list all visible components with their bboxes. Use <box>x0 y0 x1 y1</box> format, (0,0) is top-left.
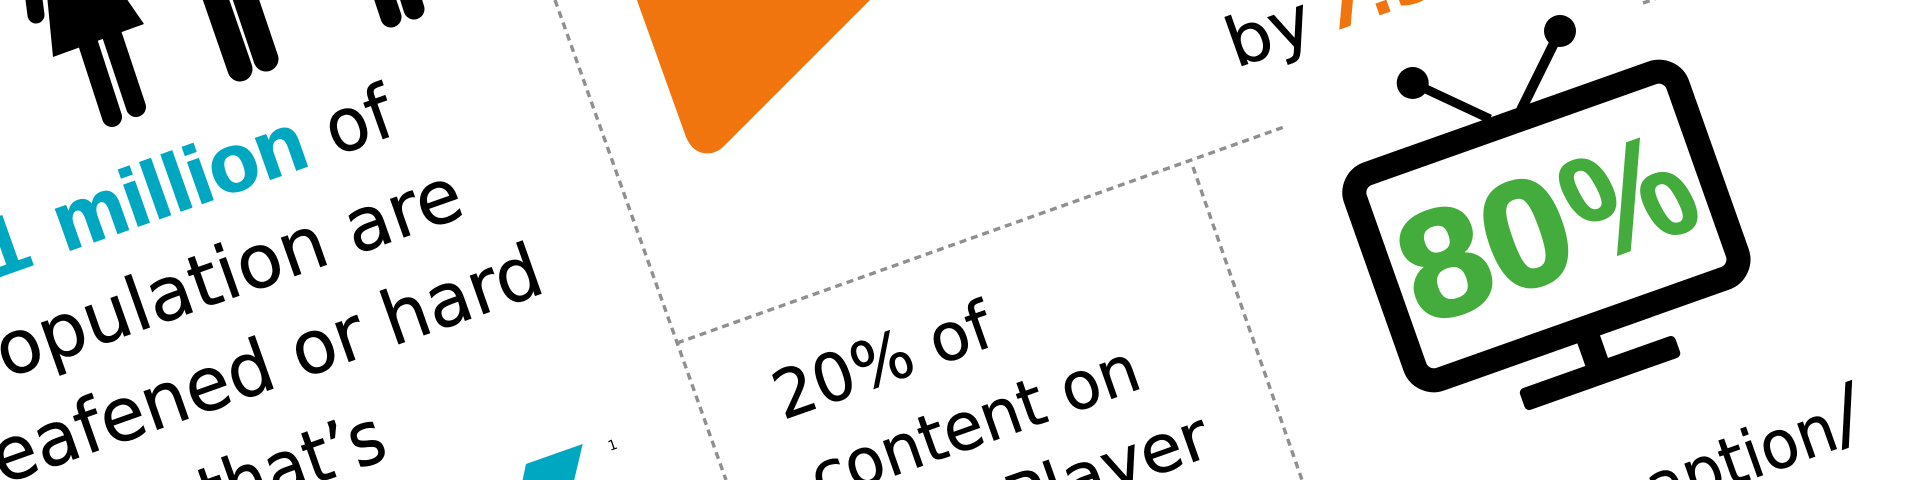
icon: woman figure <box>33 0 144 117</box>
icon: orange triangle <box>634 0 878 153</box>
icon: man figure <box>214 0 266 69</box>
icon: third figure <box>382 0 414 17</box>
text block: caption: / <box>1827 366 1868 468</box>
text block: 20 percent of content: 20% of <box>763 286 1004 435</box>
text block: 11 million statistic: of <box>312 69 407 173</box>
text block: by figure <box>1215 0 1446 84</box>
80 percent: % <box>1533 102 1724 292</box>
text block: 11 million statistic <box>0 69 553 480</box>
icon: teal shape <box>510 444 583 480</box>
80 percent <box>1376 102 1724 357</box>
icon: television with 80 percent <box>1349 15 1764 441</box>
80 percent: 80 <box>1376 139 1595 357</box>
stand <box>1573 324 1610 372</box>
antennae <box>1397 15 1576 119</box>
text block: 11 million statistic: million <box>41 96 318 269</box>
panel: people icons <box>33 0 414 117</box>
screen frame <box>1349 66 1744 386</box>
footnote marker: 1 <box>606 437 620 455</box>
